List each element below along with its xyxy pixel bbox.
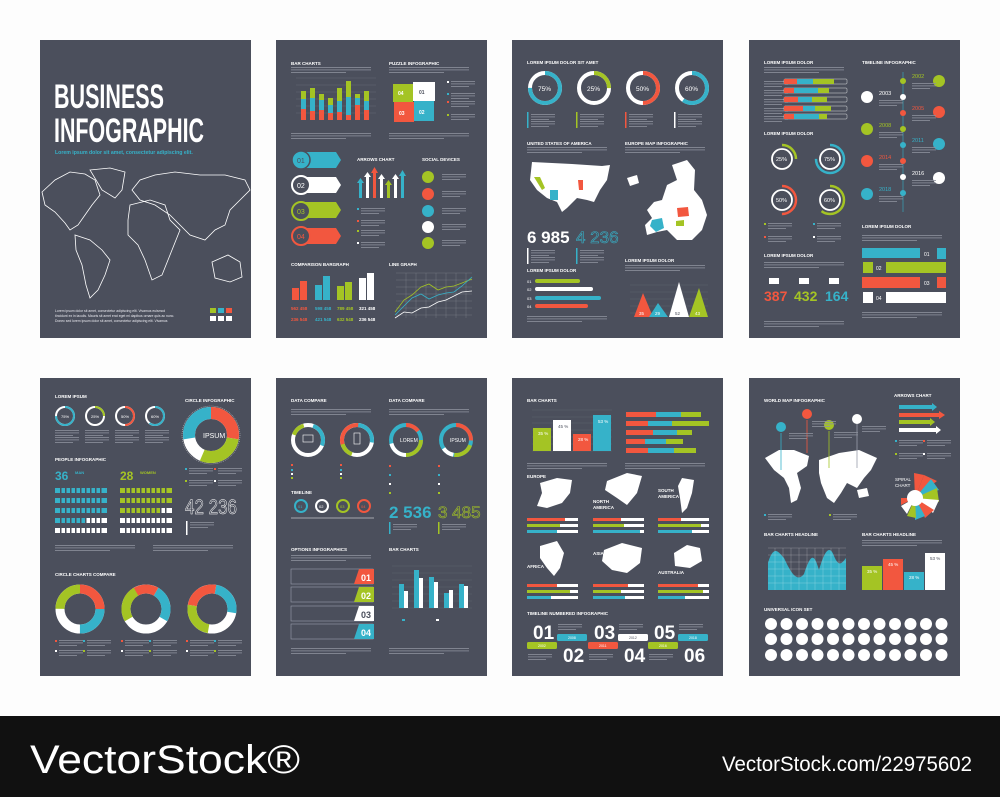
heading: puzzle: PUZZLE INFOGRAPHIC [389, 61, 440, 66]
page 4: 2014 [879, 155, 891, 161]
page 3: 29 [655, 311, 661, 316]
page 8 [749, 378, 960, 676]
page 3 [512, 40, 723, 338]
page 4: 25% [776, 157, 787, 163]
page 7: 2018 [689, 636, 697, 640]
page 7: 2012 [629, 636, 637, 640]
page 4: 50% [776, 198, 787, 204]
universal icon set: UNIVERSAL ICON SET [764, 607, 813, 612]
colour squares [210, 308, 232, 321]
page 2: 562 458 [291, 306, 308, 311]
footer text: Lorem ipsum dolor sit amet, consectetur adipiscing elit. Vivamus euismod [55, 309, 165, 313]
page 7: 01 [533, 623, 555, 644]
page 8: 28 % [909, 575, 919, 580]
continents: AUSTRALIA [658, 570, 685, 575]
donut charts [530, 73, 707, 103]
continents: AMERICA [593, 505, 615, 510]
page 8: 53 % [930, 556, 940, 561]
page 2: 421 548 [315, 317, 332, 322]
title [54, 78, 204, 150]
page 7: 03 [594, 623, 615, 644]
small donuts: 75% [61, 414, 69, 419]
numbered arrows: 03 [297, 209, 305, 216]
page 2 [276, 40, 487, 338]
page 2: 789 458 [337, 306, 354, 311]
watermark bar: VectorStock.com/22975602 [722, 753, 972, 776]
page 4: 03 [924, 281, 930, 287]
bar chart: 53 % [598, 419, 608, 424]
page 6: LOREM [400, 438, 418, 444]
area chart: BAR CHARTS HEADLINE [764, 532, 818, 537]
page 3: 01 [527, 279, 532, 284]
headings: DATA COMPARE [389, 398, 425, 403]
options infographics: OPTIONS INFOGRAPHICS [291, 547, 347, 552]
continent bars [527, 518, 709, 599]
Europe map: EUROPE MAP INFOGRAPHIC [625, 141, 689, 146]
numbered arrows: 01 [297, 158, 305, 165]
bar chart: 28 % [578, 437, 588, 442]
big numbers: 2 536 [389, 503, 432, 522]
social devices: SOCIAL DEVICES [422, 157, 460, 162]
spiral chart: SPIRAL [895, 477, 912, 482]
small donuts: 50% [121, 414, 129, 419]
stacked horizontal bars [764, 79, 847, 122]
circle infographic: CIRCLE INFOGRAPHIC [185, 398, 235, 403]
page 2: 236 548 [359, 317, 376, 322]
page 3: 35 [639, 311, 645, 316]
headings: DATA COMPARE [291, 398, 327, 403]
page 7: 2008 [568, 636, 576, 640]
page 2: 598 458 [315, 306, 332, 311]
small donuts: 25% [91, 414, 99, 419]
page 7: 2016 [659, 644, 667, 648]
page 7: 2011 [599, 644, 607, 648]
world map with pins [765, 409, 886, 503]
donut charts: 75% [538, 86, 551, 93]
page 2: 632 548 [337, 317, 354, 322]
arrows legend [357, 208, 385, 248]
numbered arrows: 02 [297, 183, 305, 190]
page 7: 02 [563, 646, 584, 667]
page 4: 01 [924, 252, 930, 258]
page 6: 04 [361, 504, 366, 509]
page 3: 04 [527, 304, 532, 309]
bar chart: 45 % [558, 424, 568, 429]
continents: SOUTH [658, 488, 674, 493]
page 4: 75% [824, 157, 835, 163]
heading: LOREM IPSUM DOLOR SIT AMET [527, 60, 599, 65]
page 7: 06 [684, 646, 705, 667]
page 4: 2005 [912, 106, 924, 112]
page 8: 45 % [888, 562, 898, 567]
continents: AFRICA [527, 564, 545, 569]
puzzle: 03 [399, 111, 405, 117]
world map outline [42, 168, 250, 298]
headings [291, 398, 425, 403]
page 3: 4 236 [576, 228, 619, 247]
page 5 [40, 378, 251, 676]
small donuts [56, 407, 164, 425]
circle charts compare: CIRCLE CHARTS COMPARE [55, 572, 116, 577]
data compare donuts [289, 421, 475, 459]
stacked bar chart [296, 78, 376, 120]
page 5: IPSUM [203, 433, 225, 440]
page 3: 43 [695, 311, 701, 316]
page 6: 03 [340, 504, 345, 509]
page 4: 432 [794, 288, 818, 304]
numbers section: LOREM IPSUM DOLOR [764, 253, 814, 258]
line graph: LINE GRAPH [389, 262, 417, 267]
bar chart: BAR CHARTS [389, 547, 419, 552]
page 4: 2003 [879, 91, 891, 97]
page 7: 04 [624, 646, 646, 667]
page 4: 2018 [879, 187, 891, 193]
donut charts: 50% [636, 86, 649, 93]
numbered arrows [292, 151, 341, 245]
page 5: WOMEN [140, 470, 156, 475]
page 5: 36 [55, 469, 69, 483]
puzzle [393, 82, 435, 122]
donut charts: 60% [685, 86, 698, 93]
puzzle: 01 [419, 90, 425, 96]
page 8: 35 % [867, 569, 877, 574]
page 4: 02 [876, 266, 882, 272]
continents [527, 473, 702, 576]
horizontal stacked bars [626, 412, 709, 453]
bar chart headline: BAR CHARTS HEADLINE [862, 532, 916, 537]
page 6 [276, 378, 487, 676]
page 4 [749, 40, 960, 338]
page 1: cover [40, 40, 251, 338]
big numbers: 6 985 [527, 228, 570, 247]
heading: bar charts: BAR CHARTS [291, 61, 321, 66]
outline number: 42 236 [185, 496, 237, 519]
page 2: 321 458 [359, 306, 376, 311]
continents: AMERICA [658, 494, 680, 499]
small donuts: 60% [151, 414, 159, 419]
arrows chart: ARROWS CHART [357, 157, 395, 162]
option banners: LOREM IPSUM DOLOR [862, 224, 912, 229]
page 4: 164 [825, 288, 849, 304]
page 2: 236 548 [291, 317, 308, 322]
page 6: 03 [361, 610, 371, 620]
title: BUSINESS [54, 78, 164, 116]
page 4: 04 [876, 296, 882, 302]
footer text [55, 309, 174, 323]
horizontal bars: LOREM IPSUM DOLOR [527, 268, 577, 273]
USA map: UNITED STATES OF AMERICA [527, 141, 592, 146]
page 6: 02 [361, 591, 371, 601]
timeline numbered: TIMELINE NUMBERED INFOGRAPHIC [527, 611, 609, 616]
continents: EUROPE [527, 474, 546, 479]
page 6: 01 [298, 504, 303, 509]
heading: LOREM IPSUM [55, 394, 87, 399]
bar chart [532, 410, 612, 451]
page 4: 2011 [912, 138, 924, 144]
page 8: CHART [895, 483, 911, 488]
footer text: Donec sed lorem ipsum dolor sit amet, consectetur adipiscing elit. Vivamus [55, 319, 168, 323]
footer text: tincidunt ex in iaculis. Mauris sit amet erat eget mi dapibus ornare quis ac nunc. [55, 314, 174, 318]
page 5: MAN [75, 470, 84, 475]
arrows chart: ARROWS CHART [894, 393, 932, 398]
title: INFOGRAPHIC [54, 112, 204, 150]
comparison bargraph: COMPARISON BARGRAPH [291, 262, 349, 267]
page 4: 2008 [879, 123, 891, 129]
puzzle: 04 [398, 91, 404, 97]
page 6: 04 [361, 628, 371, 638]
page 7: 2002 [538, 644, 546, 648]
page 7: 05 [654, 623, 676, 644]
bar chart: 35 % [538, 431, 548, 436]
timeline pins: TIMELINE [291, 490, 312, 495]
heading world map: WORLD MAP INFOGRAPHIC [764, 398, 826, 403]
triangle chart: LOREM IPSUM DOLOR [625, 258, 675, 263]
continents: NORTH [593, 499, 609, 504]
page 6: 02 [319, 504, 324, 509]
page 6: IPSUM [450, 438, 466, 444]
watermark bar: VectorStock® [30, 738, 300, 782]
page 4: 2002 [912, 74, 924, 80]
heading: BAR CHARTS [527, 398, 557, 403]
people infographic: PEOPLE INFOGRAPHIC [55, 457, 107, 462]
page 4: 60% [824, 198, 835, 204]
page 6: 01 [361, 573, 371, 583]
page 5: 28 [120, 469, 134, 483]
heading: LOREM IPSUM DOLOR [764, 60, 814, 65]
page 7 [512, 378, 723, 676]
page 6: 3 485 [438, 503, 481, 522]
numbered arrows: 04 [297, 234, 305, 241]
watermark bar [0, 716, 1000, 797]
page 3: 52 [675, 311, 681, 316]
donut group: LOREM IPSUM DOLOR [764, 131, 814, 136]
donut charts: 25% [587, 86, 600, 93]
puzzle: 02 [419, 110, 425, 116]
page 3: 02 [527, 287, 532, 292]
page 4: 2016 [912, 171, 924, 177]
timeline: TIMELINE INFOGRAPHIC [862, 60, 916, 65]
continents: ASIA [593, 551, 605, 556]
subtitle: Lorem ipsum dolor sit amet, consectetur adipiscing elit. [55, 150, 193, 156]
page 4: 387 [764, 288, 788, 304]
page 3: 03 [527, 296, 532, 301]
puzzle legend [447, 81, 475, 120]
